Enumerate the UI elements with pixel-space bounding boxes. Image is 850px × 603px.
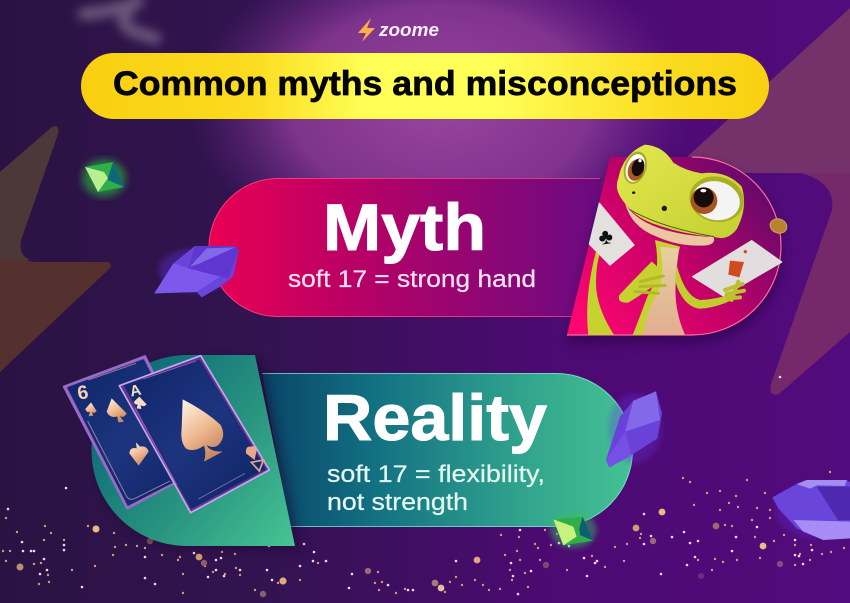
gecko tail [587, 252, 614, 335]
gecko left arm [619, 262, 661, 303]
club card [589, 203, 634, 265]
gecko lower jaw [625, 203, 714, 246]
club suit: ♣ [597, 223, 615, 250]
title text: Common myths and misconceptions [113, 65, 737, 103]
illustration: gecko with playing cards [587, 145, 782, 335]
background glow [180, 0, 700, 275]
logo: zoome [358, 18, 439, 42]
gem glow [775, 482, 850, 538]
myth heading: Myth [323, 190, 486, 264]
gem: purple right of reality pill [606, 391, 662, 467]
tile shadow [95, 358, 302, 552]
reality pill [262, 373, 633, 527]
reality pill outline [262, 374, 632, 526]
gecko right eye [685, 171, 748, 227]
tile shadow [567, 162, 783, 344]
gem glow [608, 393, 662, 463]
gecko nostrils [632, 191, 667, 211]
gecko left fingers [635, 276, 665, 293]
icon: lightning bolt [358, 18, 375, 42]
gecko body [633, 240, 685, 335]
gecko belly [643, 247, 685, 335]
myth text: soft 17 = strong hand [288, 266, 536, 293]
myth pill outline [209, 178, 600, 316]
gem: green top left [82, 159, 126, 197]
gem body [154, 246, 239, 297]
background lightning: right [687, 8, 850, 395]
tile shape [567, 157, 781, 335]
ace small spade [134, 397, 147, 409]
particles: sparkle field [3, 377, 844, 597]
six index: 6 [76, 382, 90, 405]
tile outline [567, 157, 781, 335]
gem: green bottom [550, 512, 597, 548]
ace index: A [128, 382, 143, 401]
gem body [85, 162, 124, 192]
card inner frame [88, 363, 170, 499]
card inner frame [135, 361, 245, 499]
gem body [606, 391, 662, 467]
illustration: playing cards [64, 356, 269, 513]
logo wordmark: zoome [378, 19, 439, 40]
myth pill [208, 178, 602, 317]
panel: myth [208, 178, 602, 317]
tile shape [92, 355, 295, 546]
gecko right arm [675, 265, 733, 309]
reality text: not strength [327, 489, 468, 516]
smoke wisp [84, 2, 155, 38]
card: ace of spades [119, 356, 269, 513]
diamond suit [728, 261, 744, 277]
title banner [81, 53, 769, 119]
spade pips [85, 398, 149, 466]
gem glow [158, 248, 235, 292]
gecko mouth [629, 209, 714, 237]
bottom ace index [251, 460, 263, 471]
reality text [327, 461, 545, 516]
gem glow [550, 512, 597, 548]
gem glow [82, 159, 126, 197]
gem body [772, 480, 850, 540]
panel: reality [262, 373, 633, 527]
banner pill [81, 53, 769, 119]
diamond card [693, 241, 782, 296]
panel: myth character tile [567, 157, 783, 344]
card index [744, 250, 747, 253]
gecko right hand [725, 282, 744, 300]
gecko left eye [620, 148, 651, 187]
gecko head [617, 145, 744, 238]
card: six of spades [64, 356, 201, 508]
gem body [553, 517, 593, 545]
gem: purple by myth pill [154, 246, 239, 297]
background lightning: left [0, 126, 111, 372]
large spade [181, 399, 223, 462]
bottom heart pip [246, 446, 257, 460]
reality heading: Reality [323, 381, 547, 454]
gem: large purple bottom right [772, 480, 850, 540]
reality text: soft 17 = flexibility, [327, 461, 545, 488]
coin [768, 217, 789, 235]
panel: reality cards tile [92, 355, 302, 552]
